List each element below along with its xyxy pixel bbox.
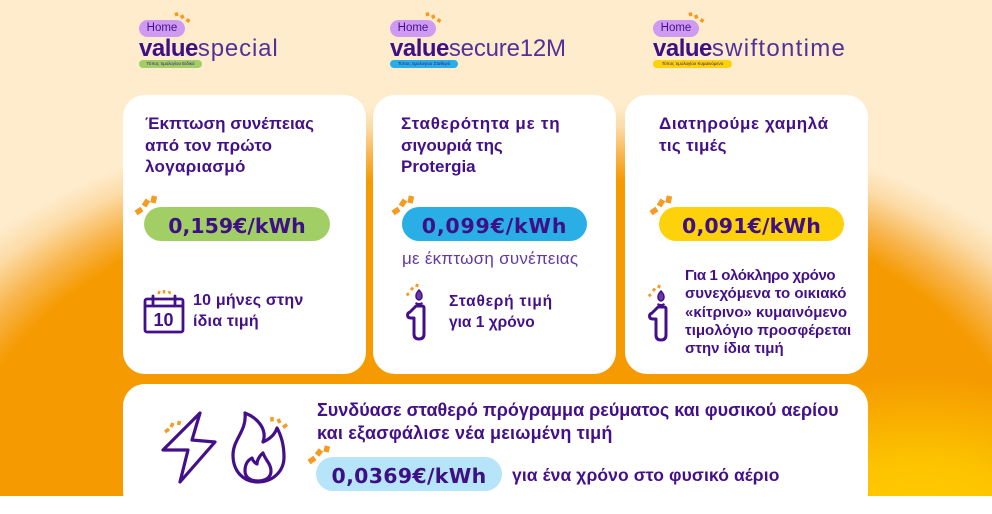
- spark icon: [650, 195, 672, 216]
- pill note: με έκπτωση συνέπειας: [402, 249, 578, 268]
- benefit text: Για 1 ολόκληρο χρόνο: [685, 267, 835, 284]
- benefit text: για 1 χρόνο: [449, 314, 535, 331]
- benefit text: τιμολόγιο προσφέρεται: [685, 322, 851, 339]
- spark icon: [174, 12, 190, 23]
- wordmark: valuesecure12M: [390, 35, 566, 62]
- tariff tag: Τύπος τιμολογίου Σταθερό: [398, 61, 450, 66]
- heading: Protergia: [401, 157, 476, 176]
- tariff tag: Τύπος τιμολογίου Κυμαινόμενο: [662, 61, 723, 66]
- logo: value swift on time: [653, 12, 846, 68]
- price pill: 0,0369€/kWh: [332, 464, 486, 488]
- icon: flame: [231, 411, 288, 484]
- home badge: [139, 20, 185, 37]
- benefit text: [449, 293, 553, 331]
- heading: [401, 114, 560, 176]
- spark icon: [134, 195, 158, 216]
- logo: value special: [139, 12, 279, 68]
- spark icon: [308, 445, 330, 464]
- price pill: [402, 207, 587, 241]
- icon: calendar: 10: [153, 310, 174, 330]
- offer note: για ένα χρόνο στο φυσικό αέριο: [512, 465, 779, 485]
- price pill: [659, 207, 844, 241]
- price pill: 0,091€/kWh: [682, 214, 821, 238]
- offer text: και εξασφάλισε νέα μειωμένη τιμή: [317, 422, 613, 442]
- offer text: [317, 400, 839, 443]
- heading: λογαριασμό: [145, 157, 246, 176]
- heading: τις τιμές: [659, 136, 727, 154]
- heading: από τον πρώτο: [145, 136, 272, 154]
- tariff tag: [139, 60, 202, 68]
- benefit text: [685, 267, 851, 357]
- spark icon: [425, 12, 442, 23]
- benefit text: Σταθερή τιμή: [449, 293, 553, 310]
- icon: lightning bolt: [161, 411, 217, 484]
- panel: combined offer: [123, 384, 868, 514]
- spark icon: [392, 195, 414, 216]
- benefit text: 10 μήνες στην: [193, 292, 303, 309]
- tariff tag: [390, 60, 458, 68]
- logo: value secure 12M: [390, 12, 566, 68]
- panel: value secure card: [373, 95, 616, 374]
- benefit text: «κίτρινο» κυμαινόμενο: [685, 304, 847, 320]
- spark icon: [688, 12, 704, 23]
- benefit text: συνεχόμενα το οικιακό: [685, 285, 846, 302]
- offer text: Συνδύασε σταθερό πρόγραμμα ρεύματος και φυσικού αερίου: [317, 400, 839, 420]
- tariff tag: Τύπος τιμολογίου Ειδικό: [147, 61, 194, 66]
- benefit text: στην ίδια τιμή: [685, 340, 784, 357]
- heading: [659, 114, 829, 154]
- icon: candle one: [648, 284, 668, 342]
- panel: value swift card: [625, 95, 868, 374]
- icon: calendar: [144, 290, 184, 334]
- benefit text: [193, 292, 303, 330]
- heading: σιγουριά της: [401, 136, 503, 154]
- price pill: 0,099€/kWh: [422, 214, 567, 238]
- home badge: [390, 20, 436, 37]
- heading: Διατηρούμε χαμηλά: [659, 114, 829, 133]
- panel: value special card: [123, 95, 366, 374]
- heading: Σταθερότητα με τη: [401, 114, 560, 133]
- home badge: Home: [398, 22, 428, 34]
- heading: [145, 114, 314, 176]
- benefit text: ίδια τιμή: [193, 312, 259, 330]
- heading: Έκπτωση συνέπειας: [145, 114, 314, 133]
- icon: candle one: [406, 284, 426, 340]
- price pill: [316, 457, 502, 491]
- price pill: [144, 207, 330, 241]
- price pill: 0,159€/kWh: [168, 214, 306, 238]
- tariff tag: [653, 60, 732, 68]
- wordmark: valueswiftontime: [653, 35, 846, 62]
- home badge: [653, 20, 699, 37]
- home badge: Home: [147, 22, 177, 34]
- wordmark: valuespecial: [139, 35, 279, 62]
- home badge: Home: [661, 22, 691, 34]
